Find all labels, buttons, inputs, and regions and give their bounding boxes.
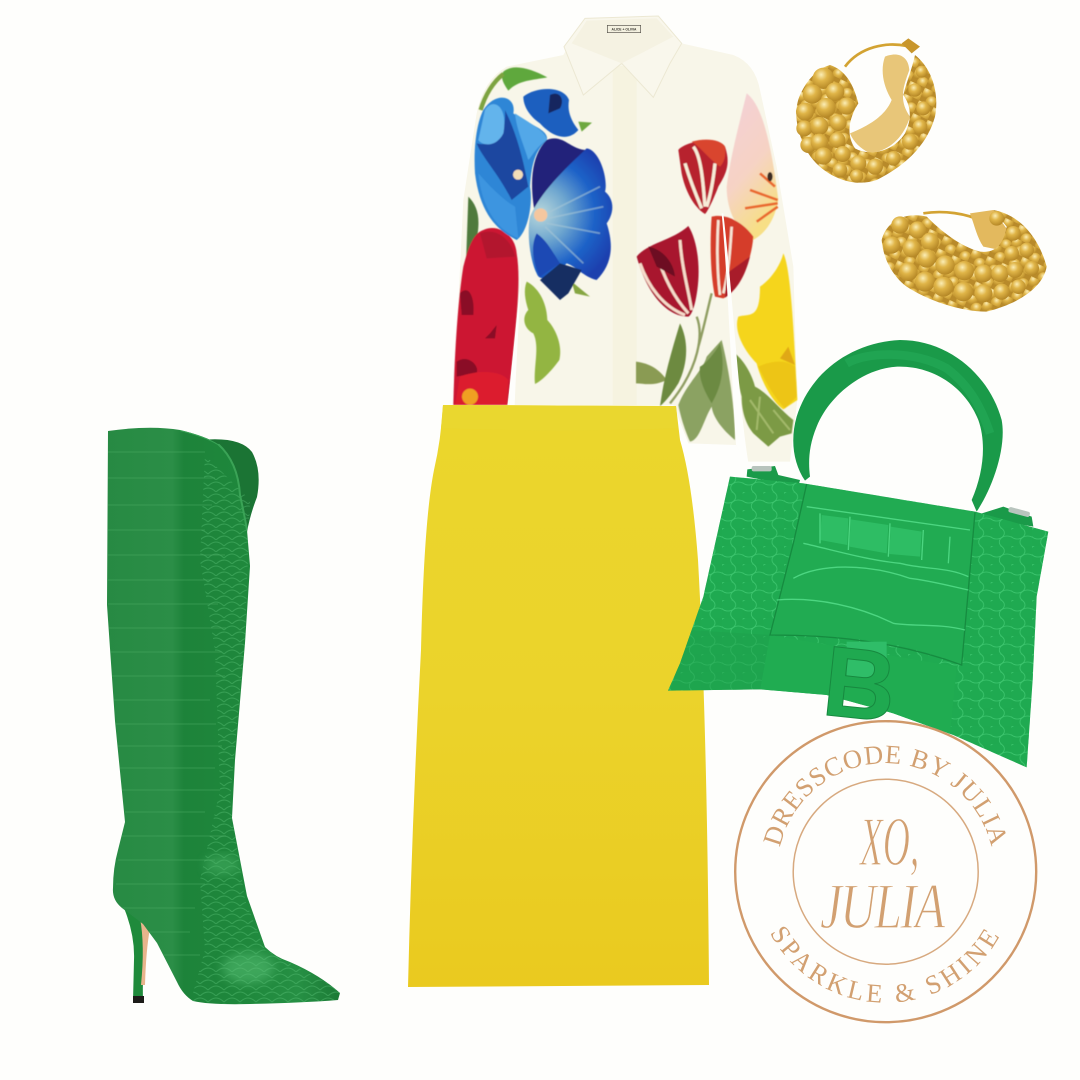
green hourglass handbag	[660, 340, 1053, 770]
yellow pencil skirt	[408, 405, 709, 987]
side leaf	[578, 122, 592, 132]
collar inner band	[572, 18, 673, 63]
earring clasp	[902, 38, 920, 53]
lower band shade	[670, 630, 770, 692]
gold earring lower	[882, 210, 1047, 312]
green croc knee boot	[107, 428, 340, 1004]
earring inner band	[970, 210, 1010, 250]
boot inner lining	[200, 439, 259, 532]
front placket	[613, 65, 637, 405]
lower front pocket	[760, 635, 957, 735]
stamp bottom text: SPARKLE & SHINE	[771, 926, 999, 1003]
earring inner band	[850, 54, 910, 153]
bag handle	[793, 340, 1003, 512]
blouse silhouette	[453, 16, 797, 462]
tulip one	[678, 140, 728, 214]
flap panel	[770, 484, 975, 665]
large beads	[796, 66, 930, 183]
gold earring upper	[796, 38, 936, 183]
stamp signature Julia: JULIA	[820, 870, 946, 943]
B logo clasp: B	[818, 625, 902, 744]
flap gloss ridges	[777, 507, 970, 630]
horizontal croc ridges	[108, 452, 226, 955]
right strap hardware	[977, 507, 1033, 527]
tulip two	[637, 226, 699, 317]
bag croc textures	[660, 470, 1053, 770]
pink petal	[727, 93, 778, 241]
skirt body	[408, 405, 709, 987]
neck label	[607, 25, 641, 33]
navy flower shade	[532, 138, 597, 213]
bag body	[668, 477, 1048, 767]
stamp signature XO: XO,	[859, 804, 919, 881]
red flower	[453, 228, 518, 405]
blue flower large	[529, 148, 612, 300]
boot shaft and foot	[107, 428, 340, 1004]
dark sleeve leaf	[466, 197, 478, 263]
tulip stems and leaves	[636, 293, 735, 442]
stamp outer ring	[735, 721, 1036, 1022]
skirt waistband	[441, 405, 678, 430]
collar	[564, 16, 682, 97]
bright green leaf	[524, 282, 560, 384]
blue flower left	[475, 98, 547, 240]
earring wire	[845, 45, 907, 67]
left strap hardware	[747, 466, 800, 487]
sleeve gap left	[508, 275, 521, 406]
boot flap edge	[180, 430, 247, 530]
ankle sheen	[204, 855, 240, 875]
earring wire	[923, 212, 983, 222]
large beads	[883, 211, 1039, 302]
stamp inner ring	[793, 779, 978, 964]
cobbled croc scales	[190, 455, 340, 1004]
top green leaf	[481, 67, 547, 110]
earring beads	[796, 55, 936, 183]
flap seam	[770, 484, 975, 665]
flap gloss blocks	[820, 515, 922, 557]
earring beaded body	[882, 210, 1047, 312]
neck label: ALICE + OLIVIA	[612, 28, 637, 32]
croc scales	[660, 470, 1053, 770]
tulip three	[711, 216, 753, 298]
stamp top text: DRESSCODE BY JULIA	[763, 746, 1006, 847]
small leaf	[572, 282, 590, 297]
sleeve gap right	[722, 213, 748, 463]
floral blouse	[453, 16, 797, 463]
boot heel	[124, 908, 150, 1003]
round stamp logo	[734, 720, 1038, 1024]
toe sheen	[222, 952, 274, 984]
sleeve foliage	[735, 353, 793, 447]
yellow flower	[737, 253, 797, 409]
blue flower top	[523, 89, 578, 137]
boot textures	[108, 430, 340, 1004]
floral print	[453, 67, 797, 447]
